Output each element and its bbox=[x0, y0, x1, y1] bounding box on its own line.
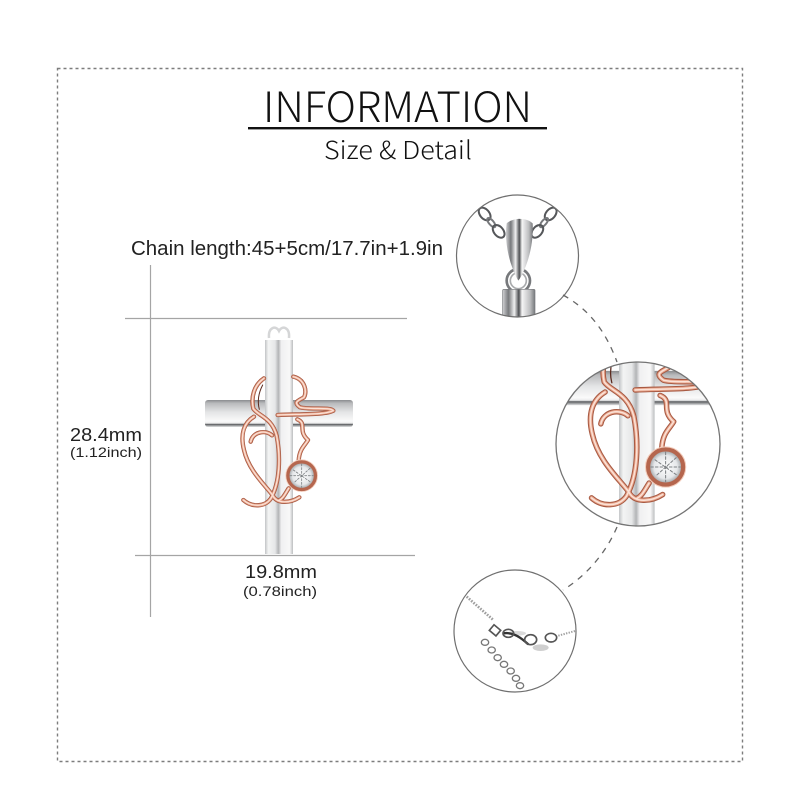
dotted frame bbox=[58, 68, 742, 762]
subtitle: Size & Detail bbox=[324, 131, 472, 167]
title underline bbox=[248, 127, 547, 129]
infographic canvas bbox=[56, 68, 744, 762]
pendant illustration bbox=[205, 328, 353, 554]
detail circle: stethoscope charm bbox=[555, 361, 721, 527]
detail circle: bail and chain bbox=[456, 195, 578, 319]
height label bbox=[70, 425, 142, 460]
width label: 19.8mm bbox=[245, 562, 317, 582]
detail circle: clasp and chain bbox=[454, 570, 576, 692]
width label bbox=[243, 562, 317, 599]
height label: (1.12inch) bbox=[70, 445, 142, 460]
height label: 28.4mm bbox=[70, 425, 142, 445]
connector: top circle to middle circle bbox=[563, 295, 617, 362]
icon: pendant loop bbox=[269, 328, 289, 338]
width label: (0.78inch) bbox=[243, 584, 317, 599]
connector: middle circle to bottom circle bbox=[563, 527, 617, 590]
chain length label: Chain length:45+5cm/17.7in+1.9in bbox=[131, 238, 443, 260]
dimension lines bbox=[125, 265, 415, 617]
title: INFORMATION bbox=[263, 74, 532, 135]
